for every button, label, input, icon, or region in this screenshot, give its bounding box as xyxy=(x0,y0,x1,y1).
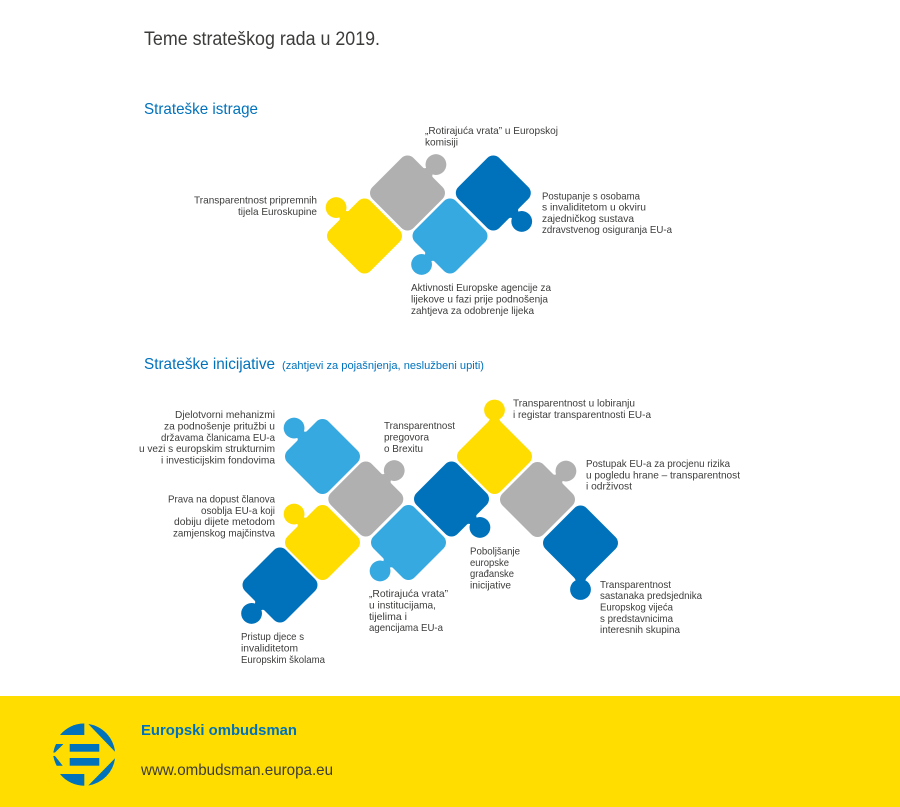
piece: light blue centre xyxy=(352,501,450,599)
heading: Strateške inicijative: Strateške inicijative xyxy=(144,356,275,373)
label: lobbying: i registar transparentnosti EU-a xyxy=(513,409,651,421)
label: medicines agency: Aktivnosti Europske agencije za xyxy=(411,282,551,294)
label: European Council president: Europskog vijeća xyxy=(600,602,673,614)
label: Eurogroup: Transparentnost pripremnih xyxy=(194,194,317,206)
label: citizens initiative: europske xyxy=(470,557,509,569)
label: complaint mechanisms: Djelotvorni mehanizmi xyxy=(175,409,275,421)
piece: yellow xyxy=(308,180,406,277)
icon: Ombudsman logo xyxy=(53,723,115,786)
label: food risk: i održivost xyxy=(586,480,632,492)
label: revolving doors institutions: „Rotirajuća vrata” xyxy=(369,588,448,600)
label: European Council president: interesnih skupina xyxy=(600,624,680,636)
label: food risk: u pogledu hrane – transparentnost xyxy=(586,470,740,482)
footer xyxy=(0,696,900,807)
label: revolving doors Commission xyxy=(425,125,558,148)
piece: dark blue xyxy=(452,152,550,249)
label: food risk: Postupak EU-a za procjenu rizika xyxy=(586,458,730,470)
label: Eurogroup: tijela Euroskupine xyxy=(238,206,317,218)
label: European schools xyxy=(241,631,325,666)
label: disability insurance: zajedničkog sustava xyxy=(542,213,634,225)
label: disability insurance: zdravstvenog osiguranja EU-a xyxy=(542,224,672,236)
label: revolving doors Commission: „Rotirajuća vrata” u Europskoj xyxy=(425,125,558,137)
piece: grey centre xyxy=(325,443,422,540)
footer url: www.ombudsman.europa.eu xyxy=(140,762,333,779)
label: medicines agency xyxy=(411,282,551,317)
label: complaint mechanisms: u vezi s europskim strukturnim xyxy=(139,443,275,455)
label: revolving doors Commission: komisiji xyxy=(425,136,458,148)
label: European Council president xyxy=(600,579,702,636)
label: complaint mechanisms xyxy=(139,409,275,466)
label: revolving doors institutions: u institucijama, xyxy=(369,600,436,612)
label: complaint mechanisms: i investicijskim fondovima xyxy=(161,454,275,466)
label: Eurogroup xyxy=(194,194,317,218)
piece: dark blue centre xyxy=(410,458,508,555)
piece: yellow top xyxy=(453,400,536,498)
footer title: Europski ombudsman xyxy=(141,722,297,739)
label: surrogacy leave: Prava na dopust članova xyxy=(168,494,275,506)
footer band xyxy=(0,696,900,807)
label: citizens initiative: Poboljšanje xyxy=(470,546,520,558)
label: European Council president: Transparentnost xyxy=(600,579,671,591)
label: citizens initiative: inicijative xyxy=(470,580,511,592)
label: revolving doors institutions: agencijama EU-a xyxy=(369,622,443,634)
label: Brexit: Transparentnost xyxy=(384,420,455,432)
label: complaint mechanisms: državama članicama EU-a xyxy=(161,432,275,444)
puzzle: strategic inquiries xyxy=(308,137,550,292)
label: European schools: Europskim školama xyxy=(241,654,325,666)
label: European Council president: sastanaka predsjednika xyxy=(600,590,702,602)
piece: light blue xyxy=(394,195,491,292)
label: disability insurance: Postupanje s osobama xyxy=(542,190,640,202)
label: European Council president: s predstavnicima xyxy=(600,613,673,625)
label: citizens initiative xyxy=(470,546,520,592)
heading: Strateške istrage: Strateške istrage xyxy=(144,101,258,118)
piece: yellow left xyxy=(266,486,364,584)
label: surrogacy leave: osoblja EU-a koji xyxy=(201,505,275,517)
piece: grey xyxy=(366,137,464,234)
label: surrogacy leave: dobiju dijete metodom xyxy=(174,516,275,528)
label: European schools: invaliditetom xyxy=(241,642,298,654)
label: complaint mechanisms: za podnošenje pritužbi u xyxy=(164,420,275,432)
label: disability insurance xyxy=(542,190,672,236)
label: lobbying: Transparentnost u lobiranju xyxy=(513,398,635,410)
label: European schools: Pristup djece s xyxy=(241,631,304,643)
label: revolving doors institutions: tijelima i xyxy=(369,611,407,623)
puzzle: strategic initiatives xyxy=(224,400,622,641)
label: lobbying xyxy=(513,398,651,421)
label: food risk xyxy=(586,458,740,492)
label: medicines agency: lijekove u fazi prije podnošenja xyxy=(411,294,548,306)
label: revolving doors institutions xyxy=(369,588,448,634)
label: Brexit xyxy=(384,420,455,455)
label: citizens initiative: građanske xyxy=(470,568,514,580)
piece: light blue top left xyxy=(266,400,364,498)
piece: dark blue right xyxy=(539,502,622,600)
piece: grey right xyxy=(496,443,594,541)
piece: dark blue bottom left xyxy=(224,544,321,641)
heading: Strateške inicijative: (zahtjevi za pojašnjenja, neslužbeni upiti) xyxy=(282,360,484,372)
heading: Strateške inicijative xyxy=(144,356,484,373)
label: disability insurance: s invaliditetom u okviru xyxy=(542,202,646,214)
label: medicines agency: zahtjeva za odobrenje lijeka xyxy=(411,305,534,317)
title: Teme strateškog rada u 2019. xyxy=(144,29,380,50)
label: surrogacy leave xyxy=(168,494,275,540)
label: Brexit: pregovora xyxy=(384,432,429,444)
label: Brexit: o Brexitu xyxy=(384,443,423,455)
label: surrogacy leave: zamjenskog majčinstva xyxy=(173,528,275,540)
